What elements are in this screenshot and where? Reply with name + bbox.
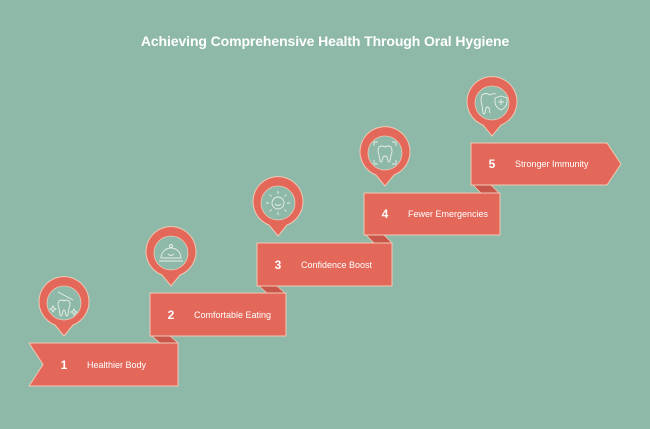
step 1: Healthier Body: Healthier Body [87, 360, 147, 370]
step 3: Confidence Boost: 3 [275, 258, 282, 272]
step 4: Fewer Emergencies [364, 193, 500, 235]
icon: pin 3 smiling sun [253, 177, 303, 236]
step 3: Confidence Boost [257, 243, 392, 286]
step 5: Stronger Immunity: Stronger Immunity [515, 159, 589, 169]
icon: pin 1 toothbrush tooth [39, 277, 89, 336]
step 4: Fewer Emergencies: Fewer Emergencies [408, 209, 489, 219]
step 2: Comfortable Eating: 2 [168, 308, 175, 322]
step 2: Comfortable Eating [150, 293, 286, 336]
step 1: Healthier Body [29, 343, 178, 386]
step 3: Confidence Boost: Confidence Boost [301, 260, 373, 270]
step 5: Stronger Immunity: 5 [489, 157, 496, 171]
step 4: Fewer Emergencies: 4 [382, 207, 389, 221]
connector folds [152, 185, 499, 343]
step 1: Healthier Body: 1 [61, 358, 68, 372]
step 5: Stronger Immunity [471, 143, 621, 185]
icon: pin 4 tooth in frame [360, 127, 410, 186]
step 2: Comfortable Eating: Comfortable Eating [194, 310, 271, 320]
icon: pin 2 smiling food cover [146, 227, 196, 286]
icon: pin 5 tooth with shield [467, 77, 517, 136]
title: Achieving Comprehensive Health Through Oral Hygiene [141, 33, 509, 49]
